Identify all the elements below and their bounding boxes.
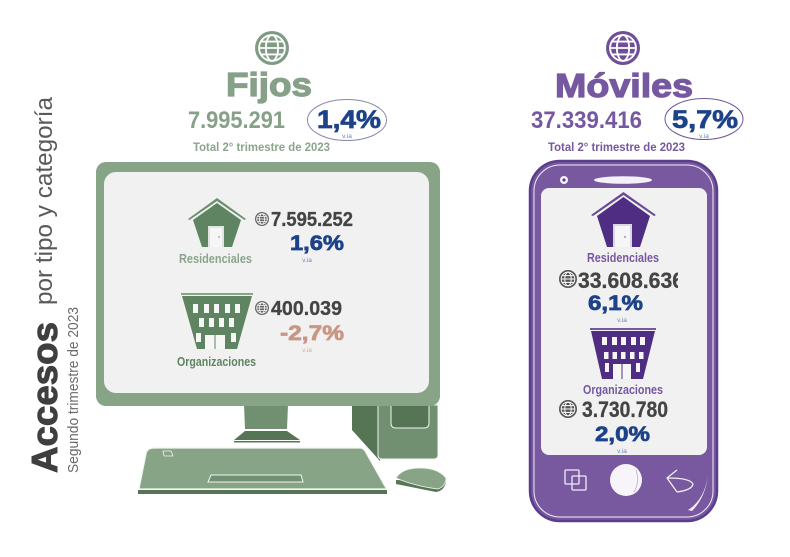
total: Fijos: 7.995.291 <box>188 107 285 134</box>
panel: Fijos Organizaciones <box>177 293 344 369</box>
keyboard <box>138 448 387 494</box>
header: Fijos <box>188 31 386 154</box>
note: v.ia: v.ia <box>617 317 627 324</box>
heading: Móviles: Móviles <box>555 67 693 104</box>
subheading: Segundo trimestre de 2023: Segundo trimestre de 2023 <box>65 307 82 473</box>
icon: house <box>591 192 656 247</box>
icon: small globe <box>255 212 269 226</box>
phone inner outline <box>534 165 713 517</box>
label: Residenciales: Residenciales <box>587 251 659 265</box>
value: Residenciales: 7.595.252 <box>271 208 353 231</box>
icon: small globe <box>559 400 577 418</box>
note: v.ia: v.ia <box>302 347 312 354</box>
heading: por tipo y categoría: por tipo y categoría <box>31 96 58 305</box>
label: Organizaciones: Organizaciones <box>177 355 256 369</box>
monitor stand <box>234 405 300 442</box>
heading: Fijos: Fijos <box>226 66 312 103</box>
badge: Móviles variation: v.ia <box>699 133 709 140</box>
back button <box>667 470 693 492</box>
variation: Residenciales: 1,6% <box>290 232 344 255</box>
value: Organizaciones: 400.039 <box>271 297 342 320</box>
panel: Móviles Residenciales <box>559 192 684 324</box>
caption: Móviles period: Total 2° trimestre de 2023 <box>548 142 685 154</box>
label: Residenciales: Residenciales <box>179 252 252 266</box>
total: Móviles: 37.339.416 <box>531 107 642 134</box>
icon: house <box>188 198 246 247</box>
heading: Accesos: Accesos <box>24 322 65 473</box>
tower <box>352 405 438 461</box>
label: Organizaciones: Organizaciones <box>583 383 663 397</box>
badge: Fijos variation: v.ia <box>342 133 352 140</box>
variation: Organizaciones: 2,0% <box>595 423 650 446</box>
note: v.ia: v.ia <box>617 448 627 455</box>
badge: Fijos variation <box>308 100 386 140</box>
home button <box>610 464 642 496</box>
variation: Residenciales: 6,1% <box>588 292 643 315</box>
note: v.ia: v.ia <box>302 257 312 264</box>
value: Organizaciones: 3.730.780 <box>582 397 668 422</box>
monitor frame <box>96 162 440 406</box>
camera <box>560 176 568 184</box>
badge: Móviles variation <box>665 98 743 140</box>
icon: small globe <box>255 301 269 315</box>
phone screen <box>541 188 707 455</box>
side title: Accesos por tipo y categoría <box>24 96 82 473</box>
header: Móviles <box>531 31 743 154</box>
icon: building <box>181 293 253 349</box>
variation: Organizaciones: -2,7% <box>280 322 344 345</box>
icon: small globe <box>559 270 577 288</box>
badge: Móviles variation: 5,7% <box>672 106 738 134</box>
icon: globe Móviles <box>606 31 640 65</box>
badge: Fijos variation: 1,4% <box>317 106 381 134</box>
panel: Fijos Residenciales <box>179 198 353 266</box>
bottom corner glint <box>688 476 708 511</box>
illustration: desktop computer <box>96 162 446 494</box>
caption: Fijos period: Total 2° trimestre de 2023 <box>193 142 330 154</box>
speaker <box>594 176 652 184</box>
icon: globe Fijos <box>255 31 289 65</box>
icon: building <box>590 328 656 379</box>
panel: Móviles Organizaciones <box>559 328 668 455</box>
recent apps button <box>565 470 586 490</box>
monitor screen <box>104 172 429 393</box>
illustration: smartphone <box>530 161 717 521</box>
mouse <box>396 468 446 492</box>
phone body <box>530 161 717 521</box>
